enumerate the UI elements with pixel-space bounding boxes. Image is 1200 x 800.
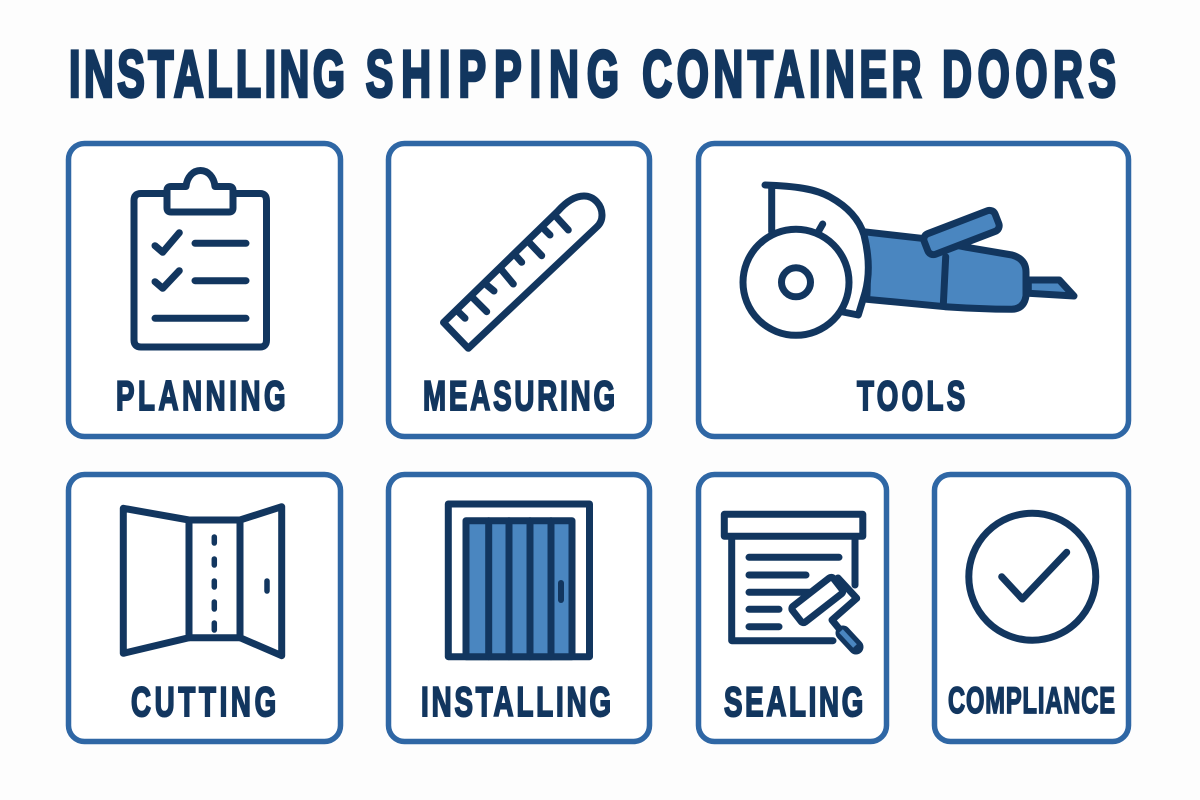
icon: seal strip and paint roller <box>724 514 863 647</box>
title: INSTALLING <box>69 37 345 111</box>
icon: clipboard checklist <box>134 170 266 347</box>
panel: sealing <box>698 474 886 742</box>
icon: angle grinder <box>743 185 1074 335</box>
panel: cutting <box>68 474 340 742</box>
label: planning: PLANNING <box>116 372 286 419</box>
label: compliance: COMPLIANCE <box>948 680 1115 721</box>
title: SHIPPING <box>366 37 619 111</box>
label: sealing: SEALING <box>724 678 863 725</box>
label: measuring: MEASURING <box>423 372 615 419</box>
icon: installed container door <box>448 504 590 657</box>
panel: planning <box>68 144 340 436</box>
icon: check mark in circle <box>969 513 1096 640</box>
title: DOORS <box>942 37 1116 111</box>
icon: door opening with cut line <box>123 507 282 656</box>
label: tools: TOOLS <box>857 372 965 419</box>
label: installing: INSTALLING <box>421 678 611 725</box>
panel: compliance <box>934 474 1128 742</box>
panel: measuring <box>388 144 650 436</box>
panel: tools <box>698 144 1128 436</box>
title: CONTAINER <box>642 37 921 111</box>
icon: ruler <box>444 196 602 348</box>
label: cutting: CUTTING <box>131 678 276 725</box>
panel: installing <box>388 474 650 742</box>
